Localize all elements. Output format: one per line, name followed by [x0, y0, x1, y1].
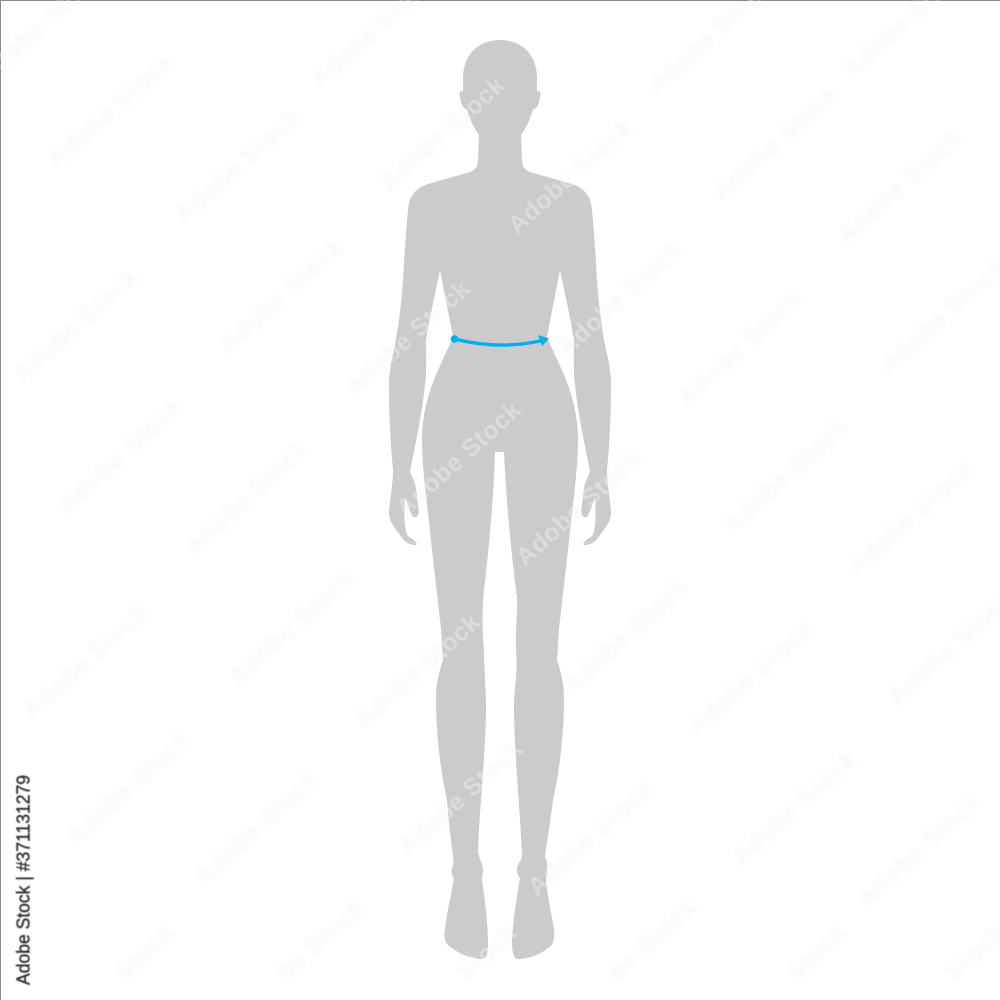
- waist measurement arrow: [451, 335, 549, 346]
- body silhouette: [389, 40, 611, 959]
- stock watermark pattern: Adobe Stock: [223, 565, 360, 691]
- stock watermark pattern: Adobe Stock: [502, 113, 639, 239]
- stock watermark pattern: Adobe Stock: [7, 263, 144, 389]
- stock watermark pattern: Adobe Stock: [510, 445, 647, 571]
- stock watermark pattern: Adobe Stock: [390, 396, 527, 522]
- stock watermark pattern: Stock: [451, 918, 522, 986]
- stock watermark pattern: be Stock: [271, 893, 370, 986]
- stock watermark pattern: Adobe Stock: [726, 745, 863, 871]
- stock watermark pattern: Stock: [781, 918, 852, 986]
- stock watermark pattern: Adobe Stock: [717, 413, 854, 539]
- stock watermark pattern: Adobe Stock: [188, 765, 325, 891]
- stock watermark pattern: Adobe Stock: [349, 608, 486, 734]
- stock watermark pattern: Adobe Stock: [52, 393, 189, 519]
- stock watermark pattern: Stock: [109, 918, 180, 986]
- stock watermark pattern: Adobe Stock: [17, 598, 154, 724]
- stock watermark pattern: Adobe Stock: [339, 275, 476, 401]
- stock watermark pattern: Adobe Stock: [557, 573, 694, 699]
- stock watermark pattern: Adobe Stock: [374, 71, 511, 197]
- stock watermark pattern: Adobe Stock: [522, 775, 659, 901]
- stock watermark pattern: Adobe Stock: [213, 233, 350, 359]
- stock watermark pattern: Adobe Stock: [42, 48, 179, 174]
- stock watermark pattern: Adobe Stock: [552, 235, 689, 361]
- stock watermark pattern: Adobe Stock: [392, 735, 529, 861]
- stock watermark pattern: Adobe Stock: [60, 725, 197, 851]
- stock watermark pattern: Adobe Stock: [851, 787, 988, 913]
- stock watermark pattern: Adobe Stock: [682, 615, 819, 741]
- vertical stock id label: Adobe Stock | #371131279: [12, 775, 34, 985]
- stock watermark pattern: Adobe Stock: [842, 455, 979, 581]
- stock watermark pattern: be Stock: [603, 893, 702, 986]
- stock watermark pattern: Adobe Stock: [832, 123, 969, 249]
- stock watermark pattern: Adobe Stock: [672, 285, 809, 411]
- stock watermark pattern: Adobe Stock: [707, 80, 844, 206]
- stock watermark pattern: Adobe Stock: [169, 103, 306, 229]
- stock watermark pattern: Adobe Stock: [178, 435, 315, 561]
